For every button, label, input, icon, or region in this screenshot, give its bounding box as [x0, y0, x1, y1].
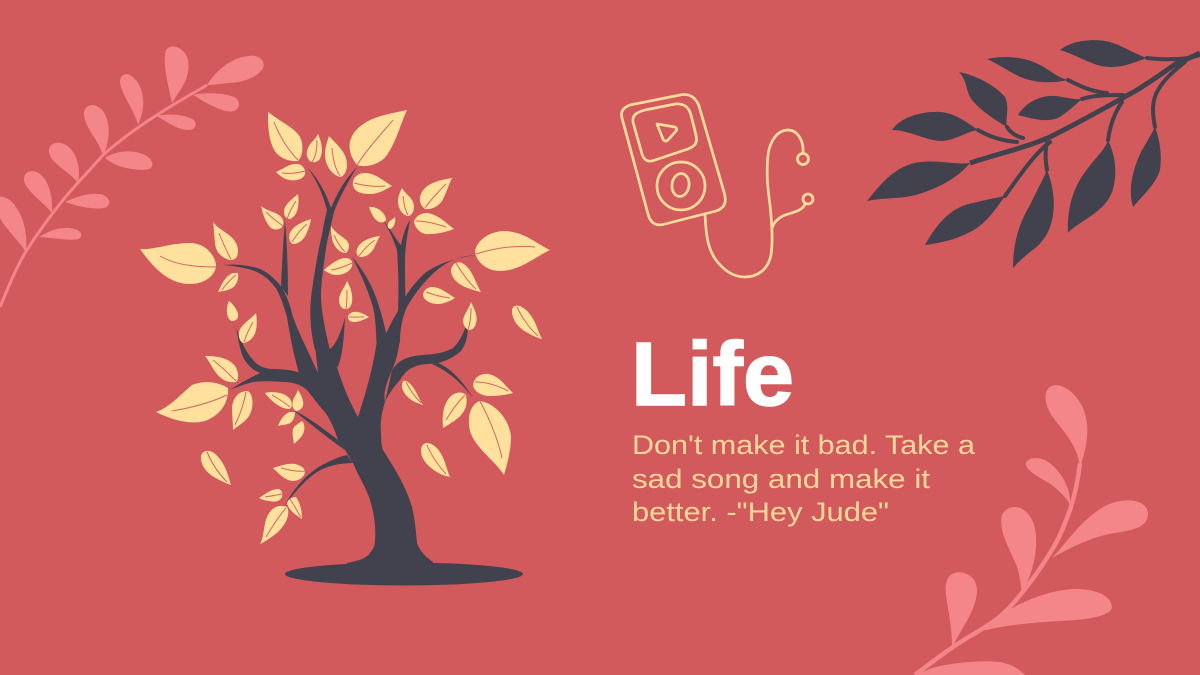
tree trunk and branches: [223, 167, 475, 572]
tree leaves: centre cluster: [261, 194, 380, 322]
pink branch: bottom right: [915, 385, 1148, 675]
tree ground shadow: [285, 562, 523, 586]
illustration: tree: [140, 110, 550, 586]
pink branch: top left: [0, 47, 264, 307]
text block: quote: [632, 430, 975, 527]
tree leaves: right cluster: [369, 178, 550, 339]
tree leaves: upper crown: [268, 110, 407, 194]
tree leaves: left cluster: [140, 222, 304, 444]
text block: quote: sad song and make it: [632, 464, 931, 494]
tree leaves: lower cluster: [201, 374, 513, 544]
dark branch: top right: [867, 40, 1200, 268]
text block: quote: better. -"Hey Jude": [632, 497, 889, 527]
heading: Life: Life: [631, 325, 794, 425]
text block: quote: Don't make it bad. Take a: [632, 430, 975, 460]
icon: music player with earphones: [622, 95, 813, 277]
